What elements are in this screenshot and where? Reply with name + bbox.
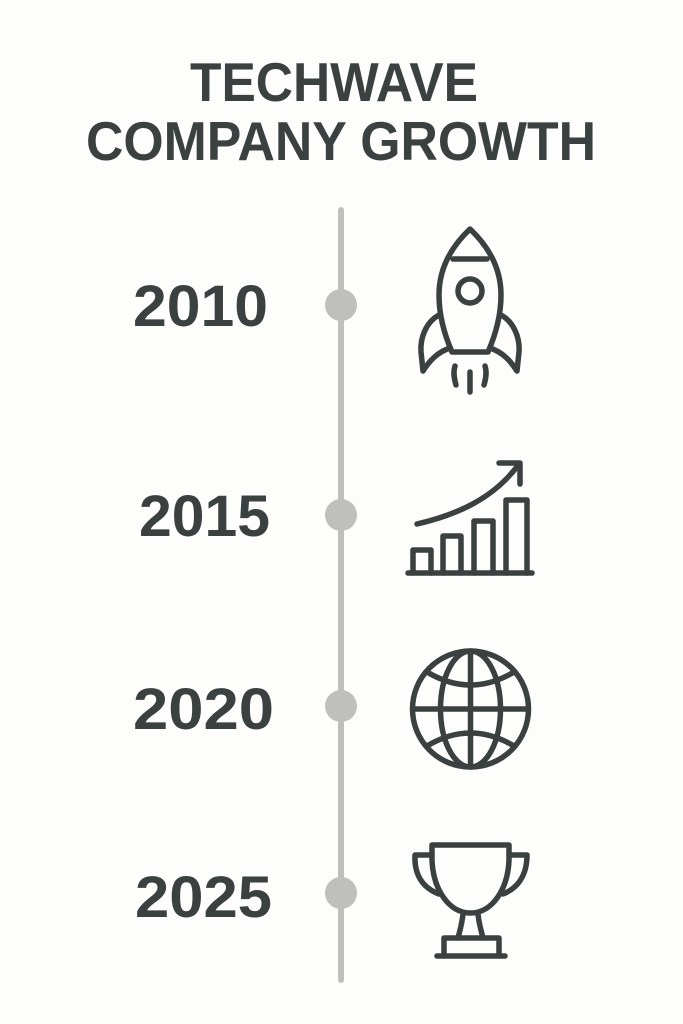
icon: globe: [412, 651, 528, 767]
year: 2020: 2020: [133, 677, 274, 742]
milestone: 2010: [133, 229, 519, 392]
timeline dot: 2015: [325, 499, 357, 531]
title: [86, 51, 596, 172]
year: 2010: 2010: [133, 274, 268, 339]
title: TECHWAVE: [190, 51, 478, 113]
year: 2015: 2015: [139, 484, 270, 549]
year: 2025: 2025: [135, 865, 272, 930]
icon: trophy: [415, 845, 527, 956]
timeline dot: 2025: [325, 877, 357, 909]
timeline dot: 2010: [325, 289, 357, 321]
milestone: 2015: [139, 463, 532, 573]
timeline axis: [338, 207, 344, 983]
milestone: 2020: [133, 651, 528, 767]
title: COMPANY GROWTH: [86, 110, 596, 172]
icon: rocket: [421, 229, 519, 392]
timeline dot: 2020: [325, 690, 357, 722]
milestone: 2025: [135, 845, 527, 956]
icon: growth chart: [408, 463, 532, 573]
